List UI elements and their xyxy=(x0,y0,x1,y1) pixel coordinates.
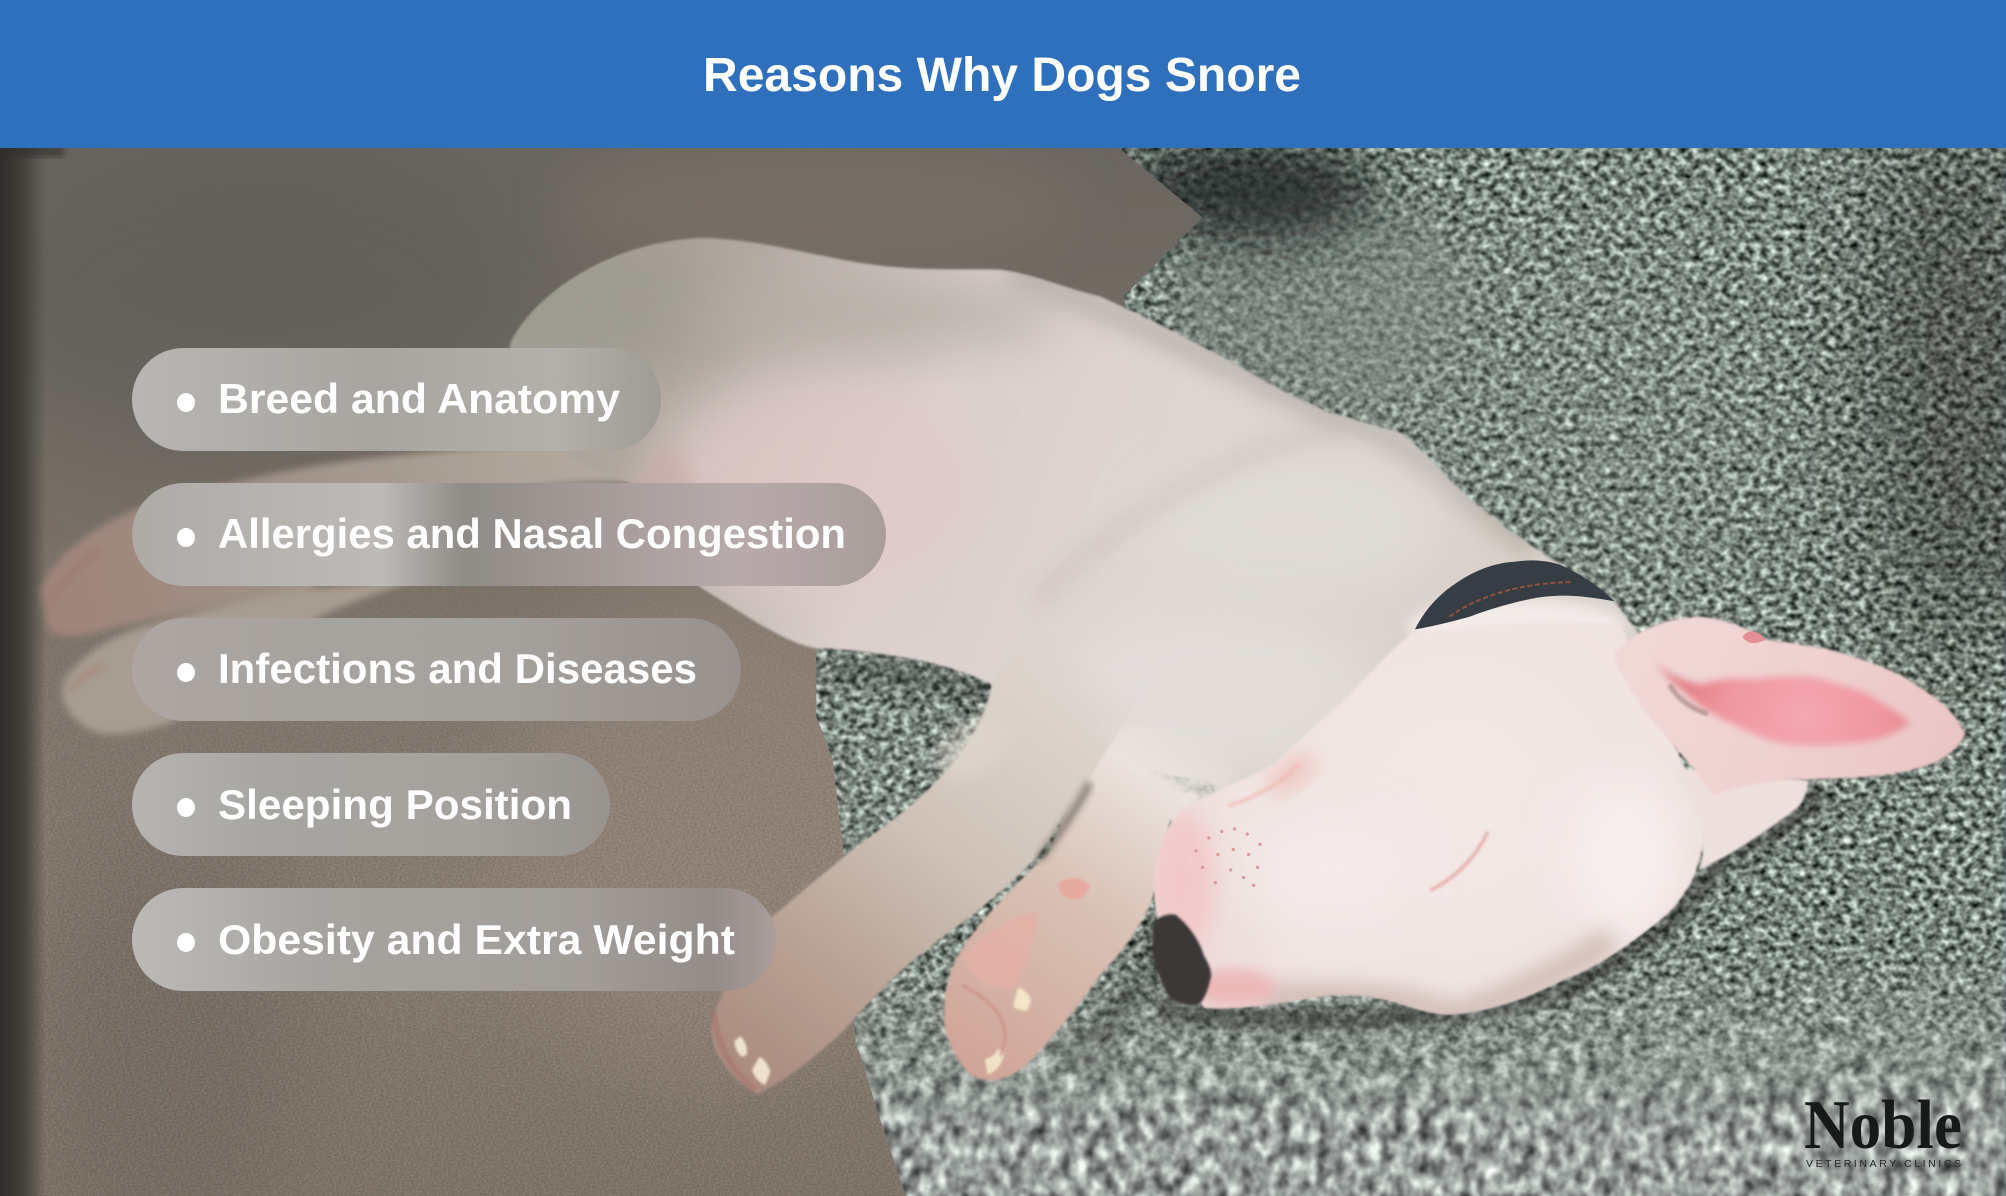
label: Breed and Anatomy xyxy=(218,375,621,422)
label: Obesity and Extra Weight xyxy=(218,916,735,963)
bullet xyxy=(177,798,195,817)
ear flap under head xyxy=(1669,768,1809,870)
logo: Noble Veterinary Clinics: Noble xyxy=(1804,1087,1962,1164)
pill: Allergies and Nasal Congestion xyxy=(132,483,886,586)
head xyxy=(1153,622,1708,1016)
front leg xyxy=(711,595,1158,1094)
hind legs xyxy=(41,445,646,734)
collar xyxy=(1415,560,1614,629)
dog xyxy=(41,230,1965,1094)
pill: Sleeping Position xyxy=(132,753,610,856)
label: Infections and Diseases xyxy=(218,645,697,692)
body xyxy=(508,236,1640,790)
bullet xyxy=(177,528,195,547)
label: Allergies and Nasal Congestion xyxy=(218,510,846,557)
nose xyxy=(1153,914,1211,1005)
bullet xyxy=(177,933,195,952)
sofa cushion background xyxy=(0,128,1279,1196)
bullet xyxy=(177,663,195,682)
second front leg xyxy=(944,723,1241,1080)
knitted grey blanket xyxy=(768,102,2006,1196)
pill: Obesity and Extra Weight xyxy=(132,888,776,991)
title: Reasons Why Dogs Snore xyxy=(703,49,1301,102)
pill: Breed and Anatomy xyxy=(132,348,661,451)
bullet xyxy=(177,393,195,412)
logo: Noble Veterinary Clinics: VETERINARY CLINICS xyxy=(1806,1158,1961,1170)
label: Sleeping Position xyxy=(218,781,572,828)
header bar xyxy=(0,0,2006,148)
pill: Infections and Diseases xyxy=(132,618,741,721)
ear xyxy=(1614,617,1965,796)
